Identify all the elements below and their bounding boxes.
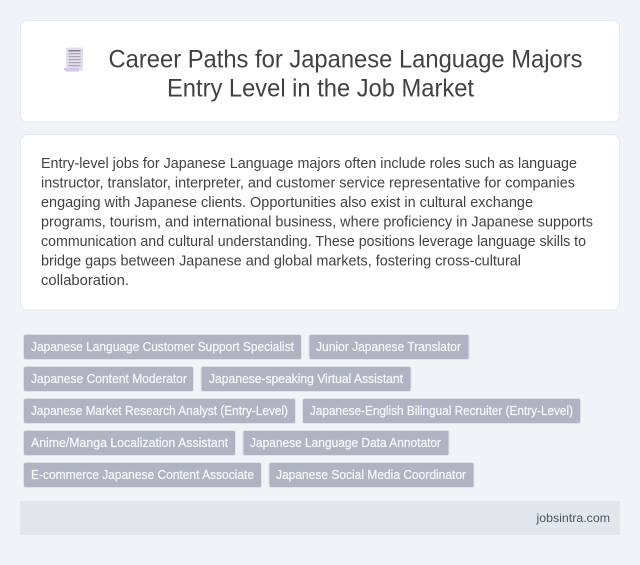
tag: Japanese Content Moderator [31, 372, 187, 386]
tag [24, 398, 296, 424]
text block: description: programs, tourism, and international business, where proficiency in Japanese supports [41, 214, 593, 230]
tag [201, 366, 411, 392]
text block: description: bridge gaps between Japanese and global markets, fostering cross-cultural [41, 254, 521, 270]
text block: description [41, 156, 593, 289]
tag: Anime/Manga Localization Assistant [31, 436, 229, 450]
tag list [24, 334, 580, 488]
tag: Japanese-English Bilingual Recruiter (Entry-Level) [310, 404, 573, 418]
tag [24, 430, 236, 456]
title: Career Paths for Japanese Language Majors [108, 46, 582, 74]
tag: E-commerce Japanese Content Associate [31, 468, 254, 482]
title [108, 46, 582, 102]
text block: description: engaging with Japanese clients. Opportunities also exist in cultural exchange [41, 195, 533, 211]
icon: paper scroll [64, 48, 83, 72]
tag [243, 430, 449, 456]
tag: Japanese Language Customer Support Specialist [31, 340, 294, 354]
text block: description: collaboration. [41, 273, 129, 289]
tag: Junior Japanese Translator [316, 340, 461, 354]
footer [20, 501, 620, 535]
tag [309, 334, 469, 360]
title: Entry Level in the Job Market [167, 74, 474, 102]
text block: description: instructor, translator, interpreter, and customer service representative for companies [41, 176, 575, 192]
tag [302, 398, 580, 424]
tag: Japanese Social Media Coordinator [276, 468, 466, 482]
tag: Japanese Market Research Analyst (Entry-Level) [31, 404, 288, 418]
tag [269, 462, 474, 488]
text block: description: Entry-level jobs for Japanese Language majors often include roles such as language [41, 156, 577, 172]
tag [24, 462, 262, 488]
tag [24, 334, 302, 360]
text block: description: communication and cultural understanding. These positions leverage language skills to [41, 234, 586, 250]
panel: title card [20, 20, 620, 122]
tag: Japanese-speaking Virtual Assistant [209, 372, 404, 386]
panel: description [20, 134, 620, 310]
footer source text: jobsintra.com [535, 511, 610, 525]
tag [24, 366, 194, 392]
tag: Japanese Language Data Annotator [250, 436, 441, 450]
